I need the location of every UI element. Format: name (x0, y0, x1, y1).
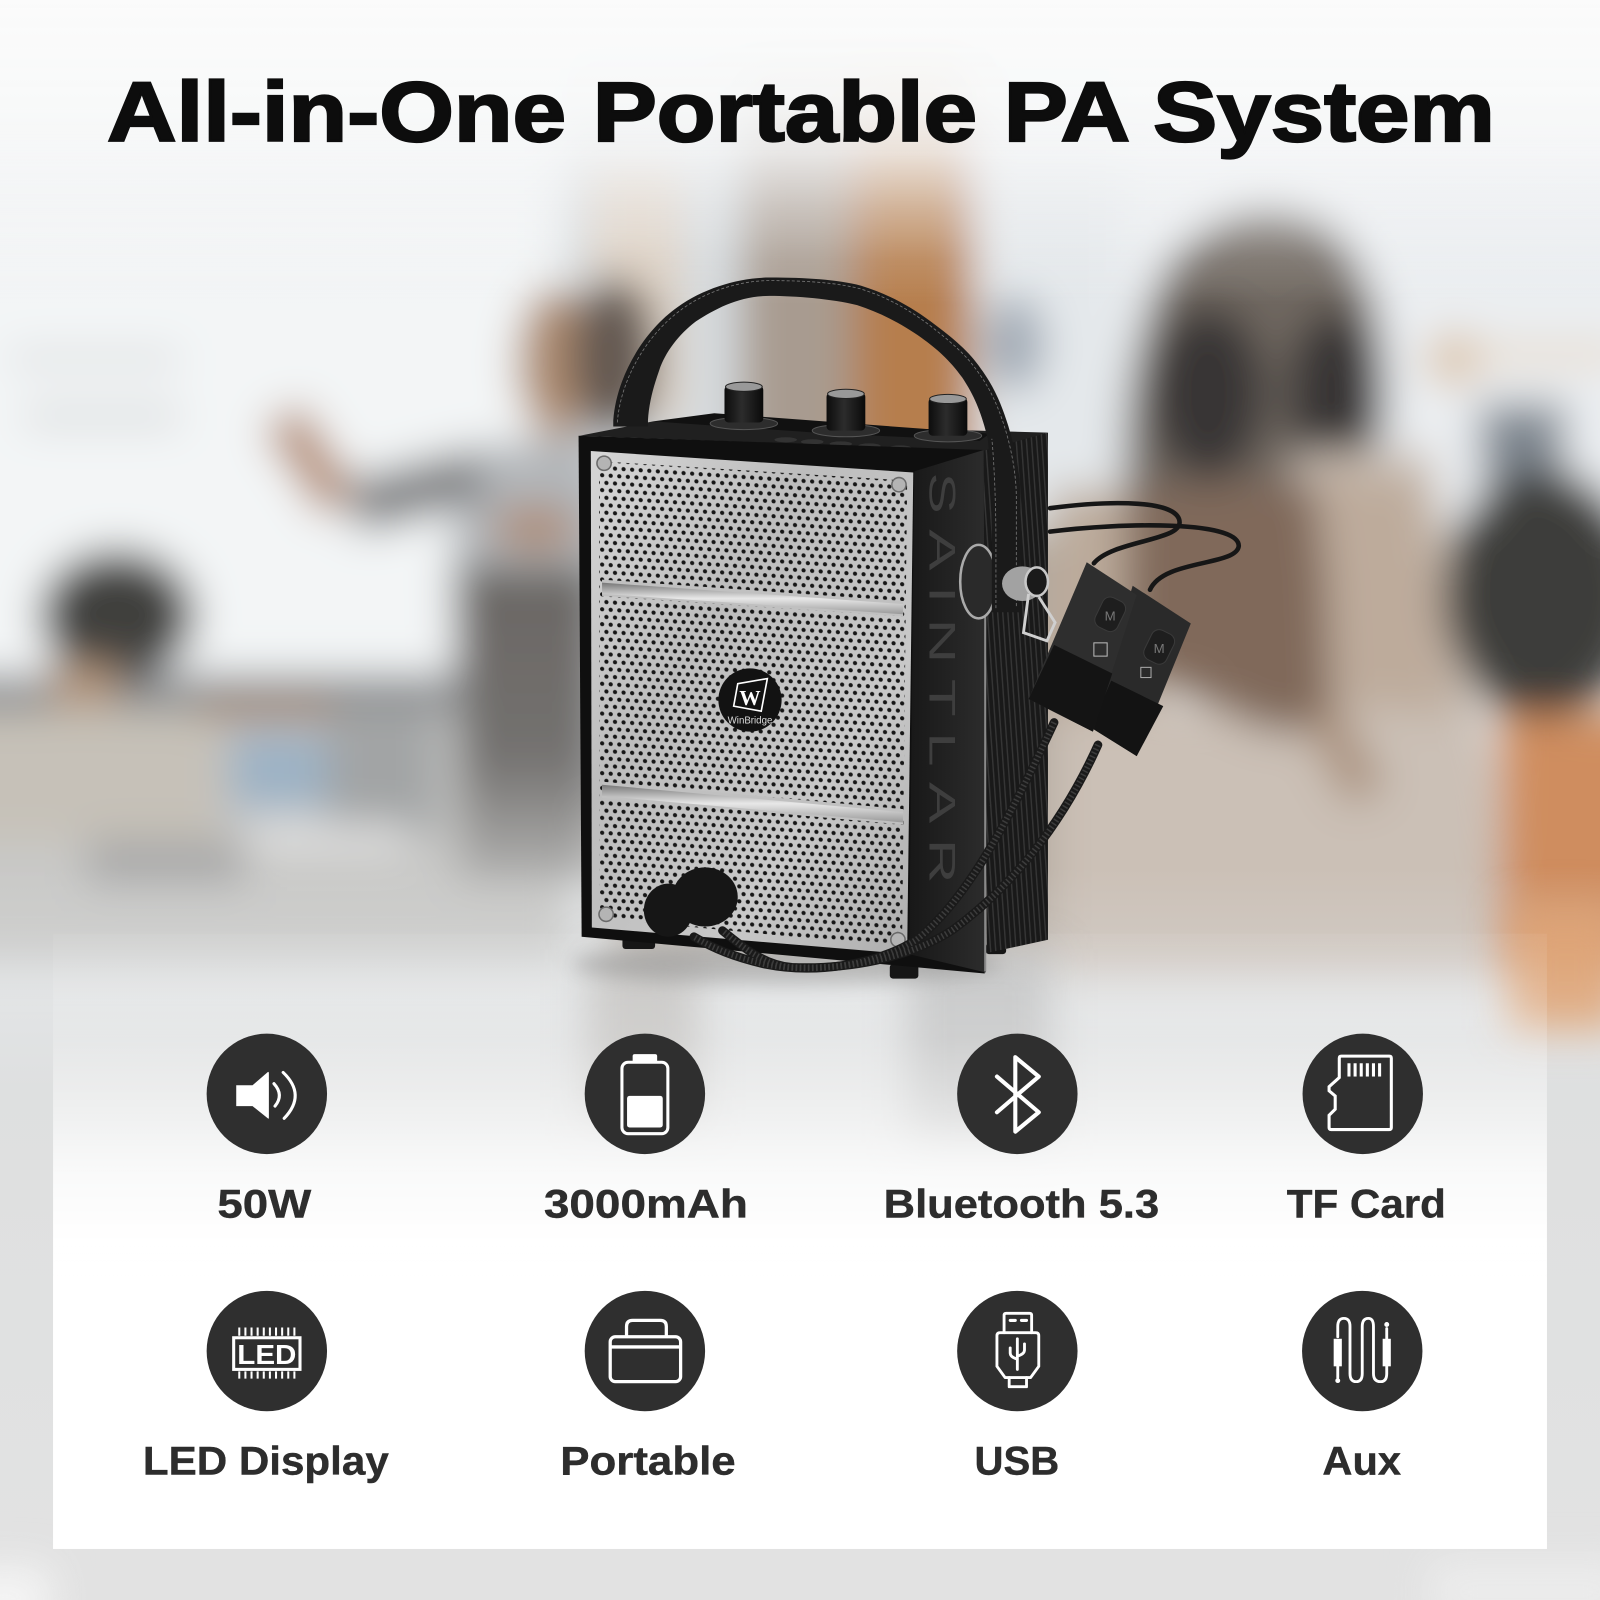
icon: battery (622, 1054, 668, 1134)
label: 50W (217, 1182, 312, 1226)
top white fade (0, 0, 1600, 306)
feature: LED Display (143, 1291, 389, 1483)
label: 3000mAh (544, 1182, 748, 1226)
strap mount ring (960, 545, 997, 618)
icon: speaker (236, 1072, 295, 1119)
translucent feature panel (53, 934, 1547, 1549)
feature: Aux (1302, 1291, 1422, 1483)
side strip (909, 450, 986, 972)
title: All-in-One Portable PA System (107, 64, 1495, 159)
wireless mic transmitter 2: M (1154, 641, 1165, 656)
brand lettering: SAINTLAR (922, 472, 963, 899)
label: Portable (560, 1439, 736, 1483)
product: portable speaker with wireless microphones (571, 278, 1239, 985)
wireless mic transmitter 2 (1091, 586, 1191, 756)
microphone cables (1050, 503, 1239, 590)
ribbed rear side (983, 433, 1048, 953)
label: TF Card (1287, 1182, 1446, 1226)
feature: TF Card (1287, 1034, 1446, 1226)
feature: USB (957, 1291, 1078, 1483)
gooseneck microphone stalks (694, 722, 1098, 968)
control plate (653, 413, 990, 441)
icon: bluetooth (997, 1057, 1039, 1132)
foam mic windscreens (644, 867, 738, 937)
side edge highlight (984, 612, 986, 971)
icon: carrying case (610, 1320, 681, 1382)
wireless mic transmitter 1: M (1105, 608, 1116, 623)
carrying strap (613, 278, 1020, 612)
label: Aux (1322, 1439, 1401, 1483)
speaker soft shadow (571, 944, 1000, 985)
WinBridge badge (718, 668, 782, 732)
label: Bluetooth 5.3 (884, 1182, 1159, 1226)
top surface (580, 421, 1048, 451)
grille perforations (599, 461, 907, 947)
feature: Bluetooth 5.3 (884, 1034, 1159, 1226)
strap bolt and D-ring (1002, 566, 1055, 641)
label: LED Display (143, 1439, 389, 1483)
lower veil over the photo (0, 867, 1600, 1600)
icon: micro SD card (1329, 1056, 1391, 1130)
volume knobs (710, 382, 982, 442)
silver perforated grille (591, 451, 913, 954)
WinBridge badge: W (739, 686, 761, 710)
black front frame (579, 436, 985, 973)
WinBridge badge: WinBridge (728, 715, 772, 726)
label: USB (974, 1439, 1059, 1483)
icon: LED chip: LED (237, 1339, 296, 1370)
corner screws (597, 456, 906, 947)
icon: aux cable (1334, 1318, 1391, 1382)
speaker feet (622, 937, 1006, 979)
wireless mic transmitter 1 (1029, 562, 1137, 732)
icon: LED chip (234, 1328, 300, 1379)
buttons row (774, 437, 911, 451)
icon: USB plug (997, 1313, 1039, 1387)
feature: Portable (560, 1291, 736, 1483)
feature: 50W (207, 1034, 327, 1226)
feature: 3000mAh (544, 1034, 748, 1226)
grille grooves (602, 580, 903, 824)
